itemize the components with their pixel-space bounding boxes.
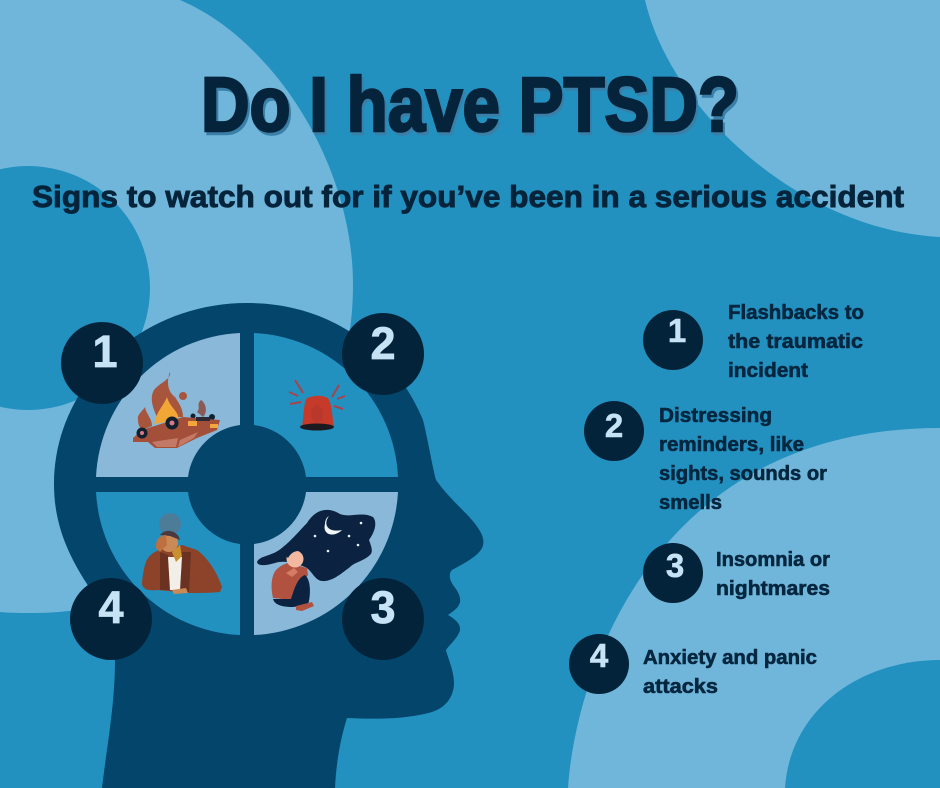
list item 3: nightmares xyxy=(716,577,830,600)
list item 1: the traumatic xyxy=(728,330,863,353)
list item 4: Anxiety and panic xyxy=(643,646,817,669)
badge 4 xyxy=(70,578,152,660)
list item 1: incident xyxy=(728,359,808,382)
list item 4: 4 xyxy=(590,637,609,674)
icon: red siren xyxy=(289,380,345,430)
list item 2: Distressing xyxy=(659,404,772,427)
list item 3 xyxy=(643,543,830,603)
list item 2: 2 xyxy=(605,407,623,444)
list item 2: sights, sounds or xyxy=(659,462,827,485)
panel 1 xyxy=(96,333,240,477)
badge 2 xyxy=(342,313,424,395)
panel 4 xyxy=(96,492,240,635)
subtitle: Signs to watch out for if you’ve been in a serious accident xyxy=(32,179,904,214)
list item 1 xyxy=(643,301,864,382)
panel 2 xyxy=(254,333,398,477)
background circle: bottom right corner xyxy=(785,660,940,788)
list item 4: attacks xyxy=(643,675,718,698)
moon xyxy=(325,516,342,535)
list item 1: Flashbacks to xyxy=(728,301,864,324)
badge 4: 4 xyxy=(98,582,124,633)
head silhouette xyxy=(54,303,483,788)
list item 3: 3 xyxy=(666,547,684,584)
list item 4 xyxy=(569,634,817,698)
list item 1: 1 xyxy=(668,312,686,349)
center hub xyxy=(187,424,307,544)
head diagram xyxy=(54,303,483,788)
badge 1: 1 xyxy=(92,326,118,377)
panel 3 xyxy=(254,492,398,635)
background blob: bottom right xyxy=(568,428,940,788)
background blob: top right xyxy=(645,0,940,237)
badge 1 xyxy=(61,322,143,404)
title: Do I have PTSD? xyxy=(203,65,741,151)
badge 3: 3 xyxy=(370,582,396,633)
list item 2: reminders, like xyxy=(659,433,804,456)
badge 3 xyxy=(342,578,424,660)
background blob: top left xyxy=(0,0,353,613)
icon: burning overturned car xyxy=(133,372,220,448)
list item 2: smells xyxy=(659,491,722,514)
list item 2 xyxy=(584,401,827,514)
list item 3: Insomnia or xyxy=(716,548,830,571)
icon: person with headache xyxy=(142,513,222,594)
background circle: left xyxy=(0,166,150,410)
icon: person sitting under night sky xyxy=(257,510,375,611)
title: Do I have PTSD? xyxy=(201,62,739,148)
badge 2: 2 xyxy=(370,318,396,369)
